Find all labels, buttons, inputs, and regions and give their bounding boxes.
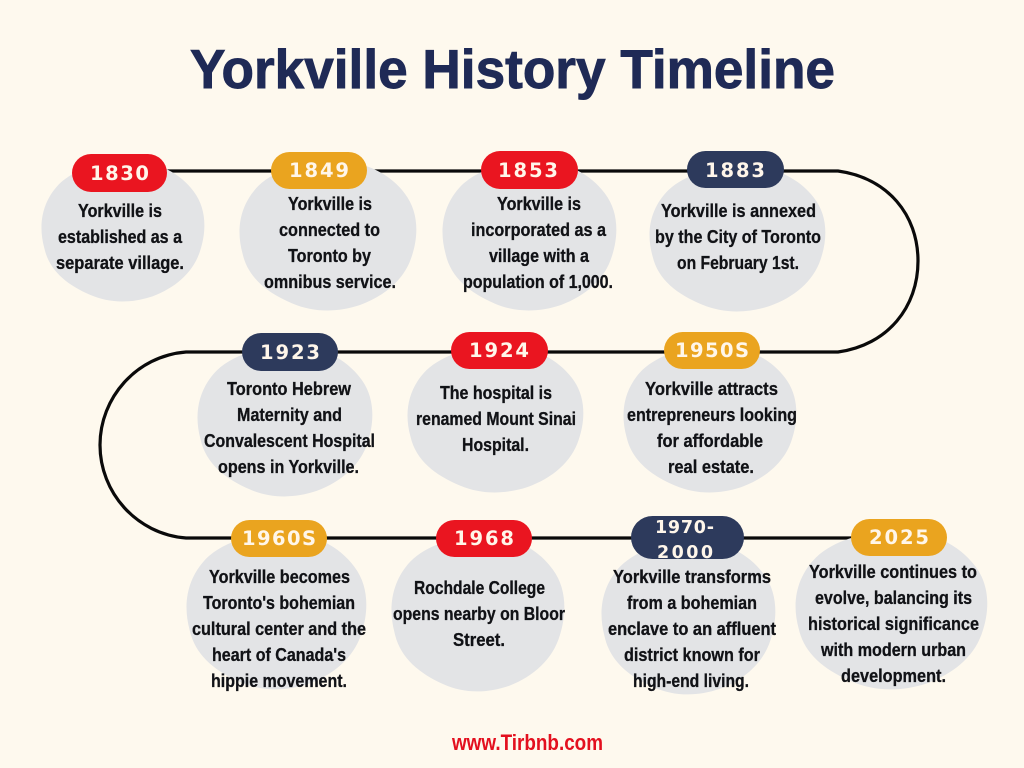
description: cultural center and the xyxy=(192,619,366,639)
year label: 1968 xyxy=(454,527,514,550)
description: Toronto's bohemian xyxy=(203,593,355,613)
description xyxy=(264,194,396,292)
footer website: www.Tirbnb.com xyxy=(451,730,603,755)
blob background xyxy=(408,346,583,492)
description: Street. xyxy=(453,630,505,650)
description: established as a xyxy=(58,227,183,247)
description: Rochdale College xyxy=(414,578,545,598)
description: Yorkville is xyxy=(288,194,372,214)
year pill xyxy=(631,516,744,559)
description xyxy=(627,379,797,477)
description: from a bohemian xyxy=(627,593,757,613)
year label xyxy=(655,518,714,563)
milestone: 1923 xyxy=(198,333,375,496)
description xyxy=(56,201,184,273)
description: opens in Yorkville. xyxy=(218,457,359,477)
year label: 1960S xyxy=(242,527,316,550)
description: development. xyxy=(841,666,946,686)
description: on February 1st. xyxy=(677,253,799,273)
description: omnibus service. xyxy=(264,272,396,292)
blob background xyxy=(602,541,775,694)
blob background xyxy=(198,346,372,496)
description xyxy=(393,578,565,650)
year pill xyxy=(436,520,532,557)
blob background xyxy=(391,536,564,691)
description: hippie movement. xyxy=(211,671,347,691)
year pill xyxy=(481,151,578,189)
description: by the City of Toronto xyxy=(655,227,821,247)
year label: 2000 xyxy=(657,543,713,563)
description: Yorkville is annexed xyxy=(661,201,816,221)
blob background xyxy=(650,166,825,311)
description: village with a xyxy=(489,246,590,266)
description: with modern urban xyxy=(820,640,966,660)
description: Yorkville continues to xyxy=(809,562,977,582)
description: entrepreneurs looking xyxy=(627,405,797,425)
milestone: 1970-2000 xyxy=(602,516,776,694)
description: Yorkville attracts xyxy=(645,379,778,399)
description: for affordable xyxy=(657,431,763,451)
description: population of 1,000. xyxy=(463,272,613,292)
description: real estate. xyxy=(668,457,754,477)
description: Yorkville transforms xyxy=(613,567,771,587)
description: connected to xyxy=(279,220,380,240)
blob background xyxy=(187,533,366,689)
milestone: 1960s xyxy=(187,520,366,691)
blob background xyxy=(240,161,416,310)
year label: 1950S xyxy=(675,339,749,362)
description xyxy=(608,567,776,691)
year pill xyxy=(451,332,548,369)
year label: 2025 xyxy=(869,526,929,549)
description: Toronto by xyxy=(288,246,371,266)
milestone: 1924 xyxy=(408,332,583,492)
year label: 1970- xyxy=(655,518,714,538)
description xyxy=(204,379,375,477)
year label: 1924 xyxy=(469,339,529,362)
description xyxy=(463,194,613,292)
year pill xyxy=(687,151,784,188)
year pill xyxy=(271,152,367,189)
year pill xyxy=(664,332,760,369)
description: Yorkville is xyxy=(78,201,162,221)
blob background xyxy=(442,161,616,310)
year label: 1853 xyxy=(498,159,558,182)
description: opens nearby on Bloor xyxy=(393,604,565,624)
blob background xyxy=(623,346,796,492)
description: Maternity and xyxy=(237,405,342,425)
milestone: 2025 xyxy=(796,519,987,689)
description xyxy=(808,562,979,686)
year pill xyxy=(242,333,338,371)
description: renamed Mount Sinai xyxy=(416,409,576,429)
milestone: 1853 xyxy=(442,151,616,310)
description: incorporated as a xyxy=(471,220,607,240)
description: heart of Canada's xyxy=(212,645,346,665)
description: historical significance xyxy=(808,614,979,634)
year label: 1830 xyxy=(90,162,149,185)
year pill xyxy=(72,154,167,192)
description: Convalescent Hospital xyxy=(204,431,375,451)
milestone: 1950s xyxy=(623,332,797,492)
description xyxy=(655,201,821,273)
title: Yorkville History Timeline xyxy=(190,38,835,100)
year pill xyxy=(851,519,947,556)
milestone: 1968 xyxy=(391,520,565,691)
description: The hospital is xyxy=(440,383,552,403)
description xyxy=(416,383,576,455)
description: enclave to an affluent xyxy=(608,619,776,639)
description: Yorkville is xyxy=(497,194,581,214)
year label: 1849 xyxy=(289,159,349,182)
description: Toronto Hebrew xyxy=(227,379,352,399)
description: evolve, balancing its xyxy=(815,588,972,608)
milestone: 1883 xyxy=(650,151,825,311)
blob background xyxy=(796,531,987,689)
year label: 1883 xyxy=(705,159,765,182)
description: high-end living. xyxy=(633,671,749,691)
description: Yorkville becomes xyxy=(209,567,350,587)
description: Hospital. xyxy=(462,435,529,455)
description: district known for xyxy=(624,645,760,665)
year label: 1923 xyxy=(260,341,320,364)
blob background xyxy=(41,161,204,301)
year pill xyxy=(231,520,327,557)
timeline path xyxy=(100,171,918,538)
description: separate village. xyxy=(56,253,184,273)
milestone: 1849 xyxy=(240,152,416,310)
milestone: 1830 xyxy=(41,154,204,301)
description xyxy=(192,567,366,691)
